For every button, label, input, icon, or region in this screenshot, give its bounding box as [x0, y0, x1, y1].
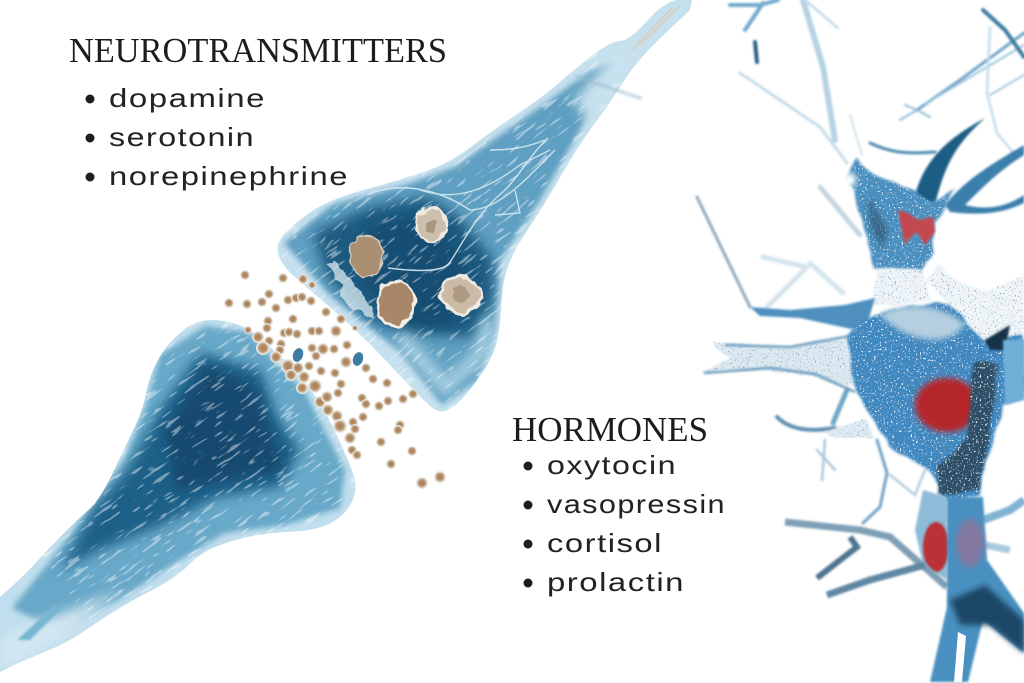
faint background dendrites — [577, 0, 1024, 523]
dark speckled band — [937, 363, 997, 493]
neuron cluster — [577, 0, 1024, 682]
red nucleus upper — [898, 210, 935, 245]
postsynaptic terminal — [0, 320, 356, 672]
left dendrite of central cell — [702, 338, 860, 390]
red nucleus centre — [915, 378, 979, 432]
list: hormones — [524, 450, 726, 597]
axon — [930, 497, 1024, 682]
lower cell — [915, 490, 947, 580]
list: hormones: vasopressin — [547, 489, 726, 519]
central cell — [847, 305, 1024, 497]
list: hormones: cortisol — [547, 528, 663, 558]
list: hormones: oxytocin — [547, 450, 677, 480]
list: neurotransmitters: dopamine — [109, 83, 266, 113]
presynaptic terminal — [278, 0, 692, 412]
dendrite edge lines — [704, 336, 855, 392]
heading: neurotransmitters: NEUROTRANSMITTERS — [69, 31, 447, 70]
list: neurotransmitters — [86, 83, 349, 191]
list: neurotransmitters: norepinephrine — [109, 161, 349, 191]
thick dendrites of upper cell — [915, 118, 985, 205]
heading: hormones: HORMONES — [512, 410, 708, 449]
cell glow — [842, 173, 856, 187]
upper cell — [845, 157, 957, 270]
vesicles — [327, 208, 481, 326]
lower dendrites — [785, 500, 1024, 595]
pale connecting bands — [873, 263, 990, 307]
list: hormones: prolactin — [547, 567, 685, 597]
neurotransmitter particles — [224, 270, 446, 489]
list: neurotransmitters: serotonin — [109, 122, 255, 152]
